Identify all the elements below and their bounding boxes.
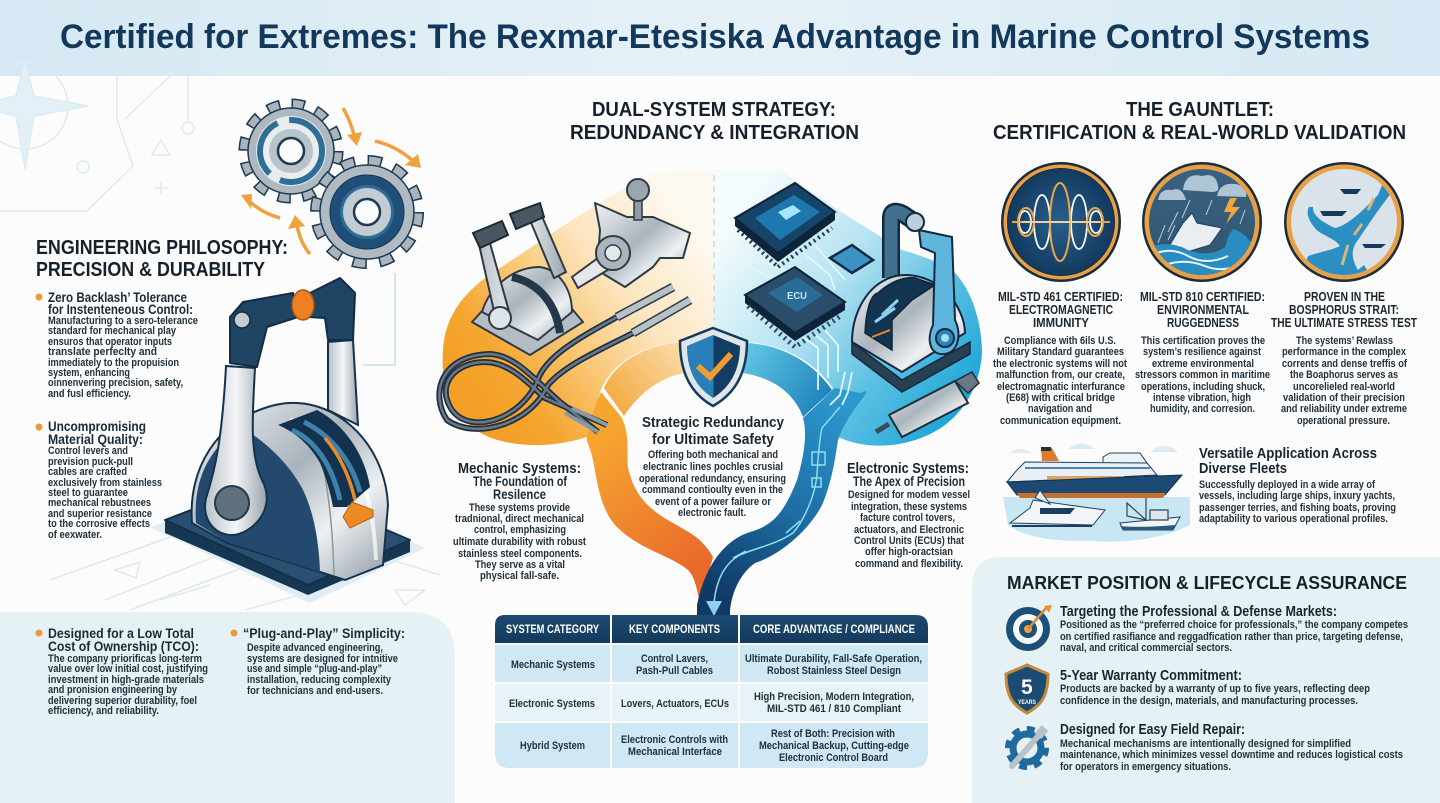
- bullet: zero backlash: immediately to the propuision: [48, 357, 179, 369]
- caption: bosphorus strait: BOSPHORUS STRAIT:: [1289, 303, 1399, 317]
- table header: SYSTEM CATEGORY: [506, 624, 599, 636]
- text: versatile application: Diverse Fleets: [1199, 461, 1287, 477]
- text: mechanic systems: These systems provide: [469, 502, 570, 514]
- text: mechanic systems: ultimate durability with robust: [453, 536, 586, 548]
- text: mechanic systems: physical fall-safe.: [480, 570, 559, 582]
- blue ribbon: [697, 388, 867, 615]
- caption: bosphorus strait: The systems’ Rewlass: [1296, 335, 1393, 347]
- caption: MIL-STD 461: (E68) with critical bridge: [1006, 392, 1115, 404]
- text: versatile application: adaptability to various operational profiles.: [1199, 513, 1388, 525]
- bullet: zero backlash: and fusl efficiency.: [48, 388, 131, 400]
- heading: dual-system strategy: REDUNDANCY & INTEGRATION: [570, 122, 859, 144]
- bullet: total cost of ownership: Designed for a Low Total: [48, 626, 194, 641]
- text: versatile application: Successfully deployed in a wide array of: [1199, 479, 1375, 491]
- bullet: total cost of ownership: and pronision engineering by: [48, 684, 178, 696]
- text: mechanic systems: They serve as a vital: [475, 559, 565, 571]
- item: professional and defense: Targeting the Professional & Defense Markets:: [1060, 603, 1337, 620]
- row: mechanic systems: Robost Stainless Steel Design: [767, 665, 901, 677]
- icon: ECU chip: ECU: [787, 291, 807, 302]
- row: hybrid system: [495, 723, 928, 768]
- item: warranty: confidence in the design, materials, and manufacturing processes.: [1060, 695, 1358, 707]
- lever housing: [192, 403, 388, 580]
- caption: bosphorus strait: the Boaphorus serves as: [1290, 369, 1398, 381]
- row: hybrid system: Hybrid System: [520, 740, 585, 752]
- text: mechanic systems: The Foundation of: [473, 474, 567, 489]
- caption: MIL-STD 461: electromagnatic interfurance: [997, 381, 1125, 393]
- text: mechanic systems: control, emphasizing: [474, 524, 566, 536]
- caption: MIL-STD 461: Compliance with 6ils U.S.: [1004, 335, 1116, 347]
- icon: gearbox: [572, 179, 690, 288]
- orange mechanical blob: [443, 170, 714, 445]
- table header: KEY COMPONENTS: [629, 624, 720, 636]
- text: versatile application: vessels, including large ships, inxury yachts,: [1199, 490, 1395, 502]
- item: field repair: for operators in emergency situations.: [1060, 761, 1231, 773]
- text: strategic redundancy: electronic fault.: [678, 507, 746, 519]
- panel: dual-system strategy: [439, 99, 982, 616]
- item: professional and defense: naval, and critical commercial sectors.: [1060, 642, 1232, 654]
- table header: CORE ADVANTAGE / COMPLIANCE: [753, 624, 915, 636]
- row: mechanic systems: [495, 645, 928, 682]
- icon: circuit traces: [745, 245, 852, 405]
- caption: bosphorus strait: validation of their precision: [1283, 392, 1405, 404]
- caption: MIL-STD 810: ENVIRONMENTAL: [1157, 303, 1249, 317]
- orange slider: [325, 438, 355, 500]
- item: field repair: [1010, 721, 1403, 773]
- bullet: plug and play: for technicians and end-users.: [247, 685, 383, 697]
- bullet: material quality: exclusively from stainless: [48, 477, 162, 489]
- panel: engineering philosophy: [36, 237, 288, 541]
- caption: MIL-STD 810: This certification proves the: [1141, 335, 1265, 347]
- caption: bosphorus strait: uncorelieled real-world: [1293, 381, 1395, 393]
- yacht: [1010, 500, 1105, 525]
- bullet: material quality: and superior resistance: [48, 508, 152, 520]
- lever handle: [230, 293, 298, 367]
- caption: MIL-STD 461: malfunction from, our create,: [996, 369, 1125, 381]
- panel: market position: [972, 557, 1440, 803]
- caption: MIL-STD 461: [993, 290, 1127, 427]
- caption: bosphorus strait: [1271, 290, 1417, 427]
- bullet: material quality: to the corrosive effects: [48, 518, 150, 530]
- cruise ship: [1041, 448, 1059, 461]
- text: mechanic systems: Mechanic Systems:: [458, 461, 581, 477]
- heading: dual-system strategy: [570, 99, 859, 144]
- panel: cost and simplicity: [0, 612, 455, 803]
- text: mechanic systems: [453, 461, 586, 582]
- text: strategic redundancy: Offering both mechanical and: [648, 449, 778, 461]
- icon: target: [1006, 605, 1052, 651]
- comparison table: [495, 615, 928, 768]
- text: mechanic systems: tradnional, direct mechanical: [455, 513, 584, 525]
- bullet: material quality: of eexwater.: [48, 529, 102, 541]
- illustration: dual control lever: [50, 273, 440, 610]
- text: electronic systems: offer high-oractsian: [865, 546, 953, 558]
- heading: the gauntlet: THE GAUNTLET:: [1126, 99, 1274, 121]
- text: electronic systems: The Apex of Precision: [853, 474, 965, 489]
- caption: MIL-STD 810: MIL-STD 810 CERTIFIED:: [1140, 290, 1265, 304]
- arrows: rotation: [250, 108, 412, 254]
- text: strategic redundancy: electranic lines pochles crusial: [643, 461, 783, 473]
- bullet: material quality: [36, 419, 162, 541]
- caption: MIL-STD 810: system’s resilience against: [1143, 346, 1261, 358]
- icon: circuit chip: [735, 183, 835, 267]
- bullet: material quality: mechanical rebustnees: [48, 497, 151, 509]
- row: mechanic systems: Pash-Pull Cables: [636, 665, 713, 677]
- icon: storm ship: [1142, 162, 1262, 282]
- bullet: zero backlash: translate perfeclty and: [48, 346, 157, 358]
- icon: actuator: [876, 372, 979, 437]
- text: electronic systems: integration, these systems: [851, 501, 967, 513]
- caption: bosphorus strait: corrents and dense treffis of: [1282, 358, 1407, 370]
- bullet: zero backlash: system, enhancing: [48, 367, 130, 379]
- caption: MIL-STD 461: Military Standard guarantees: [997, 346, 1124, 358]
- illustration: fleet of vessels: [1003, 444, 1190, 542]
- bullet: plug and play: Despite advanced engineering,: [247, 642, 383, 654]
- bullet: plug and play: [230, 626, 405, 697]
- orange ribbon: [587, 392, 713, 603]
- lever base plate: [165, 480, 410, 595]
- caption: bosphorus strait: PROVEN IN THE: [1304, 290, 1385, 304]
- row: electronic systems: MIL-STD 461 / 810 Compliant: [767, 703, 901, 715]
- bullet: plug and play: use and simple “plug-and-play”: [247, 663, 382, 675]
- text: electronic systems: Control Units (ECUs) that: [854, 535, 964, 547]
- drafting floor lines: [50, 530, 440, 610]
- gear: lower: [317, 162, 417, 262]
- circuit trace on ribbon: [714, 407, 840, 603]
- icon: electronic lever: [852, 212, 970, 392]
- blue electronic blob: [714, 170, 982, 460]
- text: electronic systems: [847, 461, 970, 570]
- caption: MIL-STD 461: communication equipment.: [1000, 415, 1121, 427]
- decorative compass rose: [0, 60, 194, 211]
- fishing boat: [1120, 517, 1180, 530]
- caption: MIL-STD 810: extreme environmental: [1152, 358, 1254, 370]
- arrowheads: [241, 132, 421, 229]
- bullet: zero backlash: Manufacturing to a sero-telerance: [48, 315, 198, 327]
- right lever arm: [328, 340, 358, 425]
- item: warranty: 5-Year Warranty Commitment:: [1060, 667, 1242, 684]
- heading: the gauntlet: CERTIFICATION & REAL-WORLD VALIDATION: [993, 122, 1406, 144]
- gears with rotation arrows: [241, 105, 421, 262]
- bullet: material quality: Material Quality:: [48, 432, 143, 447]
- row: electronic systems: High Precision, Modern Integration,: [754, 691, 914, 703]
- text: strategic redundancy: for Ultimate Safety: [652, 431, 775, 448]
- text: mechanic systems: Resilence: [493, 487, 546, 502]
- bullet: total cost of ownership: efficiency, and reliability.: [48, 705, 159, 717]
- icon: 5 year shield: 5: [1021, 676, 1033, 699]
- text: strategic redundancy: [639, 414, 786, 519]
- bullet: zero backlash: ensuros that operator inputs: [48, 336, 172, 348]
- text: electronic systems: Designed for modem vessel: [848, 489, 970, 501]
- item: warranty: [1006, 665, 1370, 713]
- text: versatile application: Versatile Application Across: [1199, 446, 1377, 462]
- gauge window: [278, 410, 370, 507]
- bullet: total cost of ownership: value over low initial cost, justifying: [48, 663, 208, 675]
- text: strategic redundancy: event of a power failure or: [655, 496, 772, 508]
- bullet: material quality: steel to guarantee: [48, 487, 128, 499]
- row: hybrid system: Electronic Controls with: [621, 734, 728, 746]
- text: versatile application: passenger terries, and fishing boats, proving: [1199, 502, 1396, 514]
- row: electronic systems: Lovers, Actuators, ECUs: [621, 698, 729, 710]
- text: strategic redundancy: Strategic Redundancy: [642, 414, 785, 431]
- bullet: total cost of ownership: Cost of Ownership (TCO):: [48, 639, 199, 654]
- bullet: zero backlash: standard for mechanical play: [48, 325, 177, 337]
- heading: dual-system strategy: DUAL-SYSTEM STRATEGY:: [592, 99, 836, 121]
- blue arc: [743, 343, 832, 417]
- title: Certified for Extremes: The Rexmar-Etesiska Advantage in Marine Control Systems: [60, 18, 1370, 56]
- text: electronic systems: actuators, and Electronic: [854, 524, 964, 536]
- icon: push-pull cables: [439, 287, 690, 432]
- gear: upper: [245, 105, 337, 197]
- item: field repair: Mechanical mechanisms are intentionally designed for simplified: [1060, 738, 1351, 750]
- text: mechanic systems: stainless steel components.: [458, 548, 582, 560]
- text: electronic systems: Electronic Systems:: [847, 461, 969, 477]
- icon: 5 year shield: YEARS: [1018, 699, 1037, 706]
- heading: engineering philosophy: [36, 237, 288, 281]
- caption: MIL-STD 810: intense vibration, high: [1153, 392, 1251, 404]
- row: hybrid system: Mechanical Backup, Cutting-edge: [759, 740, 909, 752]
- icon: mechanical lever: [472, 203, 583, 355]
- left lever arm: [205, 366, 267, 535]
- text: electronic systems: command and flexibility.: [855, 558, 963, 570]
- bullet: material quality: prevision puck-pull: [48, 456, 133, 468]
- text: strategic redundancy: command contioulty even in the: [642, 484, 783, 496]
- caption: MIL-STD 810: RUGGEDNESS: [1167, 316, 1239, 330]
- icon: gear and wrench: [1010, 728, 1045, 766]
- text: versatile application: [1199, 446, 1396, 525]
- center divider: [713, 175, 715, 320]
- item: field repair: Designed for Easy Field Repair:: [1060, 721, 1245, 738]
- bullet: total cost of ownership: [36, 626, 208, 717]
- bullet: plug and play: “Plug-and-Play” Simplicity:: [243, 626, 405, 641]
- row: hybrid system: Mechanical Interface: [628, 746, 722, 758]
- caption: bosphorus strait: performance in the complex: [1282, 346, 1407, 358]
- item: professional and defense: [1006, 603, 1408, 654]
- row: electronic systems: Electronic Systems: [509, 698, 595, 710]
- heading: market position: MARKET POSITION & LIFECYCLE ASSURANCE: [1007, 572, 1407, 593]
- row: electronic systems: [495, 684, 928, 721]
- bullet: total cost of ownership: delivering superior durability, foel: [48, 695, 197, 707]
- bullet: zero backlash: oinnenvering precision, safety,: [48, 377, 183, 389]
- item: warranty: Products are backed by a warranty of up to five years, reflecting deep: [1060, 683, 1370, 695]
- row: hybrid system: Electronic Control Board: [779, 752, 888, 764]
- caption: MIL-STD 461: MIL-STD 461 CERTIFIED:: [998, 290, 1123, 304]
- row: mechanic systems: Control Lavers,: [641, 653, 708, 665]
- caption: MIL-STD 810: humidity, and corresion.: [1150, 403, 1255, 415]
- caption: bosphorus strait: operational pressure.: [1297, 415, 1390, 427]
- text: electronic systems: facture control tovers,: [860, 512, 955, 524]
- row: mechanic systems: Ultimate Durability, Fall-Safe Operation,: [745, 653, 922, 665]
- caption: MIL-STD 461: navigation and: [1028, 403, 1092, 415]
- bullet: zero backlash: Zero Backlash’ Tolerance: [48, 290, 187, 305]
- bullet: zero backlash: for Instenteneous Control:: [48, 302, 193, 317]
- table header: [495, 615, 928, 643]
- heading: engineering philosophy: PRECISION & DURABILITY: [36, 259, 266, 281]
- row: mechanic systems: Mechanic Systems: [511, 659, 595, 671]
- caption: MIL-STD 461: IMMUNITY: [1033, 316, 1090, 330]
- row: hybrid system: Rest of Both: Precision with: [771, 728, 895, 740]
- icon: bosphorus map: [1284, 162, 1404, 282]
- caption: MIL-STD 810: [1135, 290, 1270, 415]
- caption: MIL-STD 810: stressors common in maritime: [1135, 369, 1270, 381]
- icon: electromagnetic wave: [1001, 162, 1121, 282]
- bullet: material quality: cables are crafted: [48, 466, 127, 478]
- icon: arrow into table: [706, 601, 722, 616]
- bullet: material quality: Uncompromising: [48, 419, 146, 434]
- heading: the gauntlet: [993, 99, 1406, 144]
- bullet: total cost of ownership: The company priorificas long-term: [48, 653, 202, 665]
- heading: engineering philosophy: ENGINEERING PHILOSOPHY:: [36, 237, 288, 259]
- bracket line: [363, 273, 395, 365]
- caption: MIL-STD 810: operations, including shuck,: [1141, 381, 1265, 393]
- caption: MIL-STD 461: ELECTROMAGNETIC: [1009, 303, 1113, 317]
- water and clouds: [1003, 497, 1190, 542]
- text: strategic redundancy: operational redundancy, ensuring: [639, 473, 786, 485]
- icon: shield check: [680, 328, 747, 406]
- panel: the gauntlet: [993, 99, 1417, 542]
- bullet: zero backlash: [36, 290, 198, 400]
- bullet: total cost of ownership: investment in high-grade materials: [48, 674, 204, 686]
- icon: ECU chip: [745, 267, 845, 347]
- icon: small chip: [830, 245, 873, 273]
- title band: [0, 0, 1440, 76]
- bullet: material quality: Control levers and: [48, 445, 128, 457]
- orange arc: [604, 342, 684, 416]
- bullet: plug and play: systems are designed for intnitive: [247, 653, 398, 665]
- bullet: plug and play: installation, reducing complexity: [247, 674, 392, 686]
- icon: 5 year shield: [1006, 665, 1048, 713]
- caption: MIL-STD 461: the electronic systems will not: [993, 358, 1127, 370]
- caption: bosphorus strait: and reliability under extreme: [1281, 403, 1407, 415]
